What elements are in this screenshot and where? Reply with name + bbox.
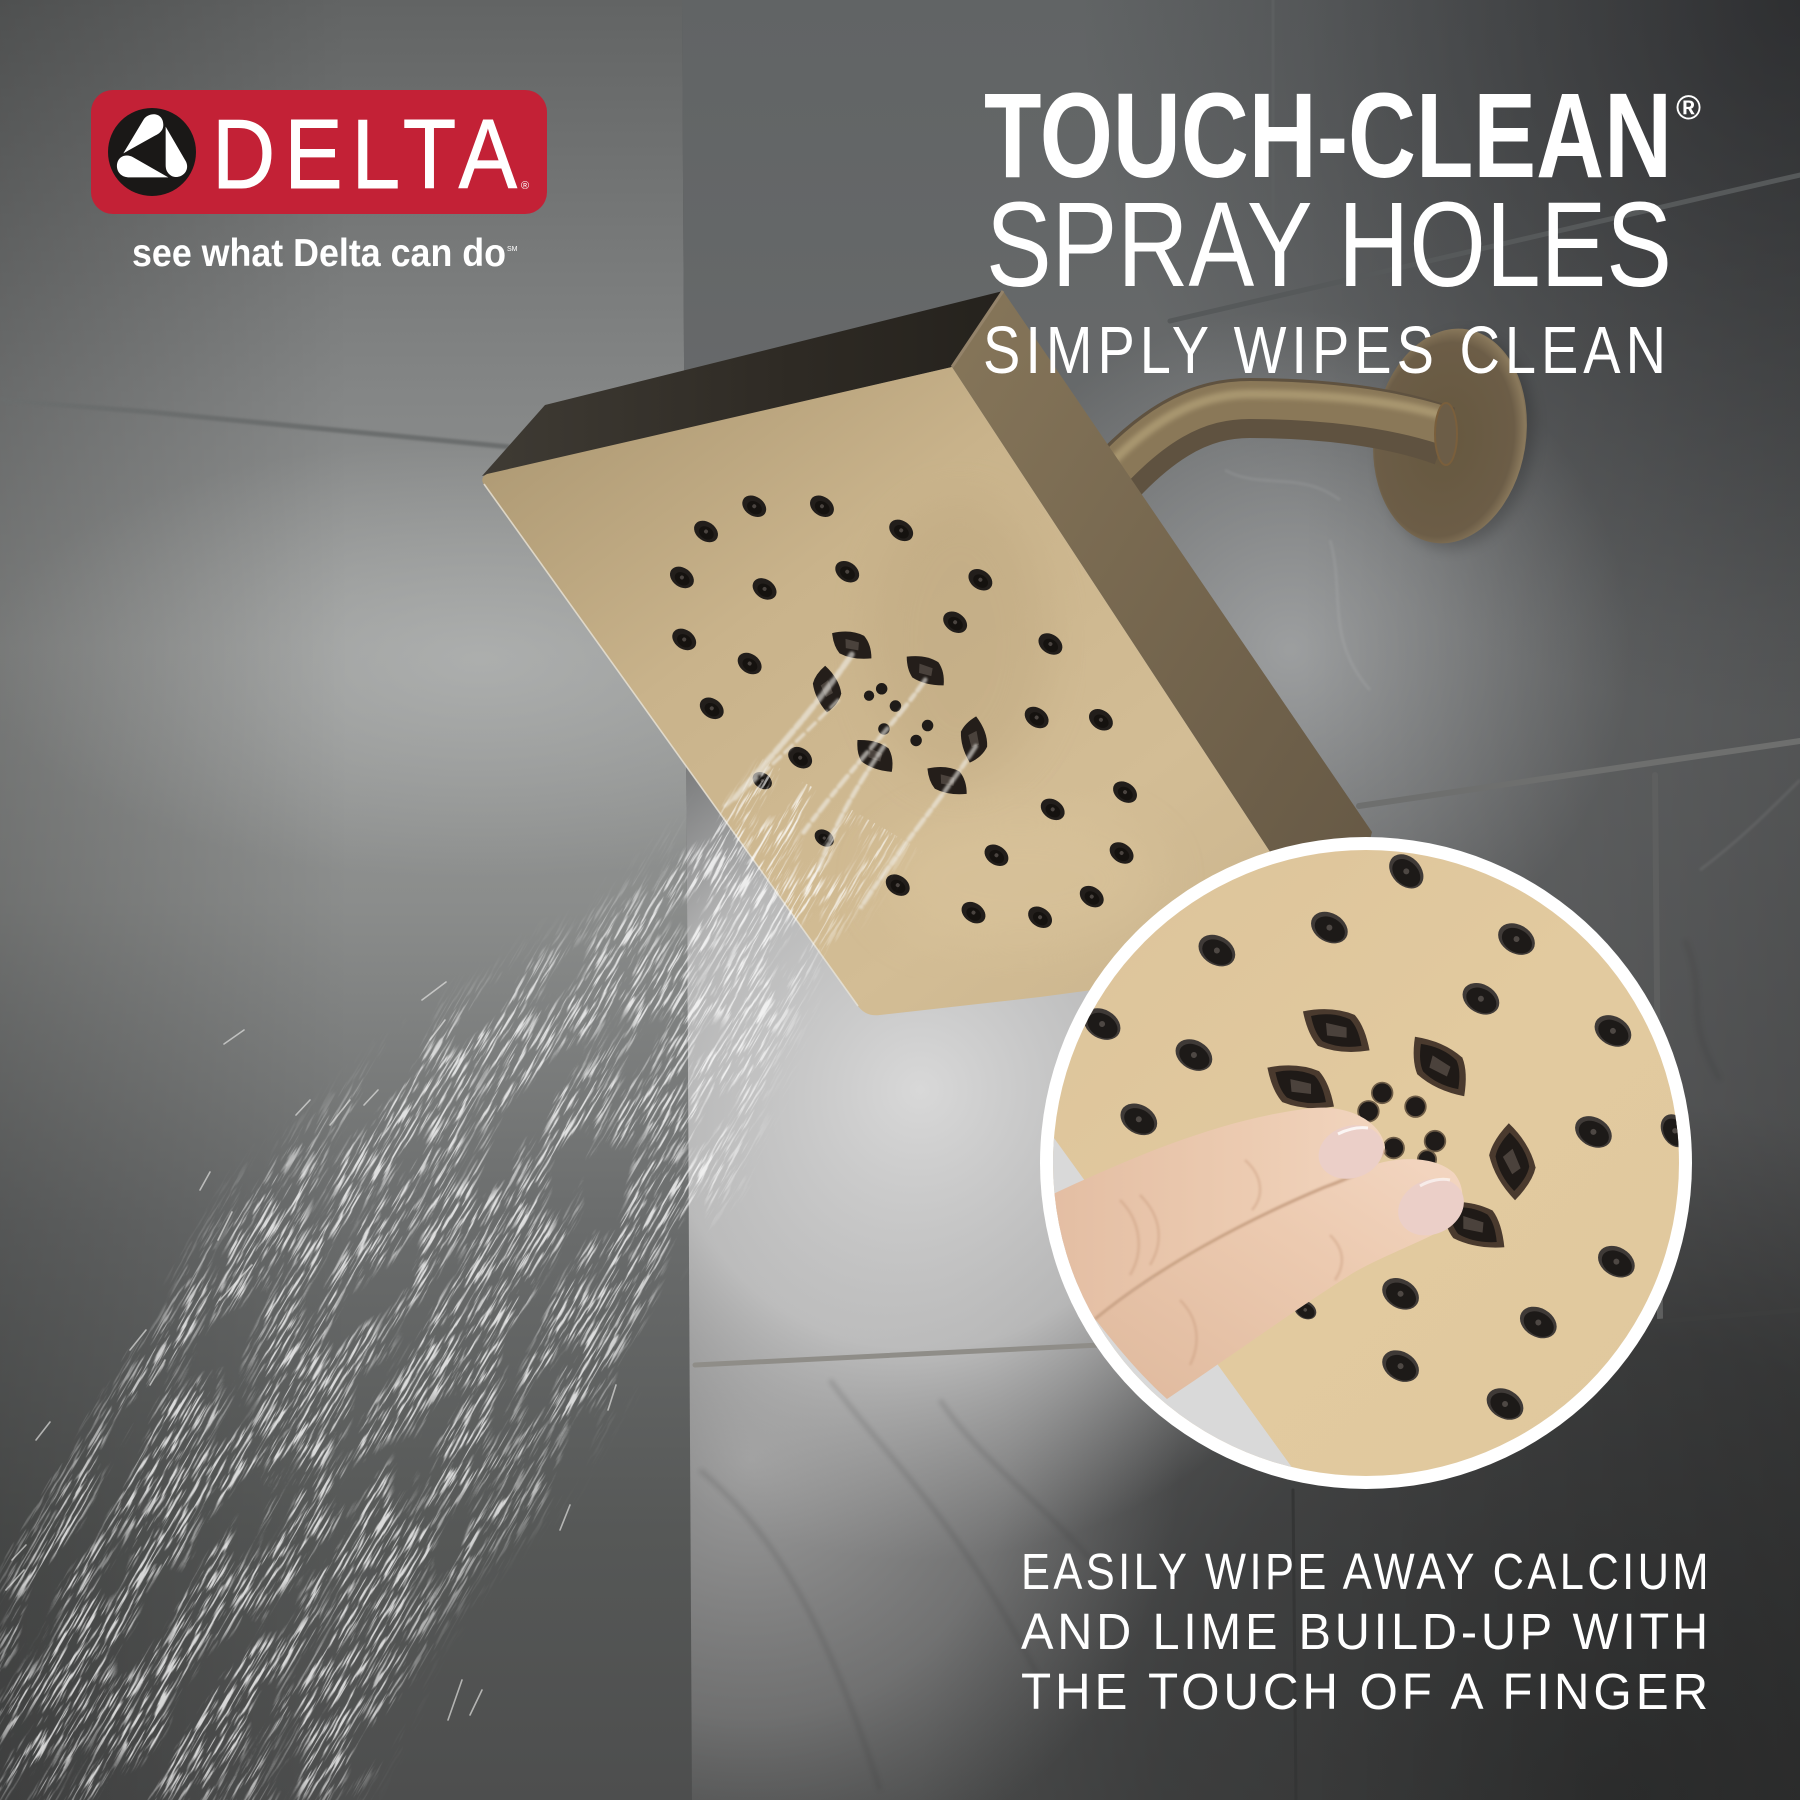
- shower arm and wall flange: [1080, 317, 1550, 560]
- background: left wall: [0, 0, 700, 1800]
- background: right wall with marble tiles: [680, 0, 1800, 1800]
- water spray: [0, 650, 980, 1800]
- head: top dark side: [482, 291, 1003, 476]
- marble veins: [1700, 780, 1800, 870]
- inset: upper finger: [1040, 1108, 1385, 1319]
- logo red badge: [91, 90, 547, 214]
- head: right side: [952, 291, 1372, 957]
- inset: gold face: [1040, 840, 1700, 1490]
- head: brushed face: [482, 367, 1339, 1015]
- bottom caption: AND LIME BUILD-UP WITH: [1021, 1603, 1712, 1660]
- bottom caption: THE TOUCH OF A FINGER: [1021, 1663, 1712, 1720]
- zoomed inset circle: [1020, 837, 1700, 1500]
- inset: finger separation: [1095, 1150, 1385, 1319]
- shower head: [482, 291, 1372, 1015]
- inset: diamond nozzles: [1267, 1009, 1549, 1249]
- inset: spray holes: [1078, 847, 1695, 1426]
- inset: finger knuckle wrinkles: [1120, 1160, 1342, 1365]
- Delta logo: SM: [507, 246, 518, 253]
- title: [983, 67, 1701, 388]
- arm pipe: [1080, 394, 1445, 520]
- logo triangle mark: [108, 108, 196, 196]
- Delta logo: [91, 90, 547, 275]
- logo tagline: see what Delta can do: [132, 232, 506, 275]
- nozzle jets: [721, 654, 976, 907]
- wall flange: [1357, 317, 1550, 560]
- title: ®: [1676, 89, 1701, 127]
- inset: wall beyond edge: [1053, 1138, 1292, 1467]
- arm end collar: [1435, 403, 1457, 465]
- spray holes on head: [666, 491, 1141, 932]
- bottom caption: [1021, 1543, 1712, 1720]
- title line 3: SIMPLY WIPES CLEAN: [983, 313, 1671, 388]
- spray streak field: [0, 759, 910, 1800]
- inset: centre holes: [1358, 1083, 1445, 1169]
- Delta logo: ®: [521, 180, 529, 192]
- inset: nails: [1318, 1126, 1464, 1236]
- outlying droplets: [6, 982, 616, 1720]
- logo wordmark: DELTA: [212, 99, 526, 209]
- tile grout lines: [692, 172, 1800, 1656]
- inset: lower finger: [1095, 1159, 1462, 1399]
- inset white ring: [1040, 837, 1692, 1489]
